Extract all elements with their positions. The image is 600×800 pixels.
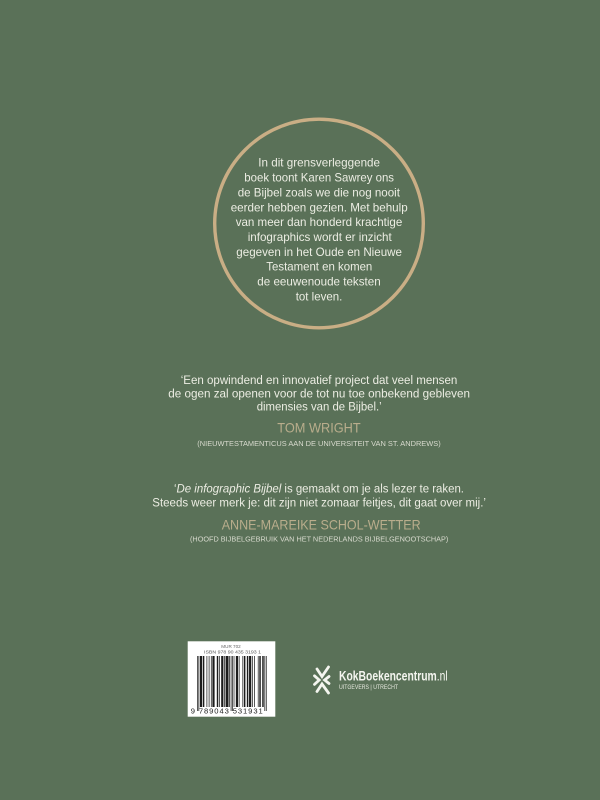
author name: ANNE-MAREIKE SCHOL-WETTER [222, 517, 421, 532]
publisher location: UITGEVERS | UTRECHT [339, 684, 398, 691]
quote text [168, 373, 470, 414]
ISBN text: ISBN 978 90 435 3193 1 [204, 650, 261, 654]
quote text: dimensies van de Bijbel.’ [257, 400, 382, 414]
publisher name: KokBoekencentrum.nl [339, 668, 448, 683]
barcode bars [197, 656, 267, 711]
gold ring [215, 119, 423, 328]
quote text: Steeds weer merk je: dit zijn niet zomaar feitjes, dit gaat over mij.’ [152, 496, 486, 510]
panel: circle with book description [215, 119, 423, 328]
icon: publisher mark [314, 667, 329, 693]
quote text: ‘De infographic Bijbel is gemaakt om je als lezer te raken. [174, 482, 464, 496]
description text [231, 156, 408, 303]
author role: (HOOFD BIJBELGEBRUIK VAN HET NEDERLANDS BIJBELGENOOTSCHAP) [190, 537, 448, 544]
description text: infographics wordt er inzicht [248, 230, 392, 244]
quote text [152, 482, 486, 510]
quote text: ‘Een opwindend en innovatief project dat veel mensen [181, 373, 457, 387]
description text: In dit grensverleggende [258, 156, 380, 170]
quote block: Tom Wright [168, 373, 470, 448]
barcode header text: MUR 702 [221, 644, 241, 649]
description text: eerder hebben gezien. Met behulp [231, 200, 408, 214]
barcode [188, 641, 275, 717]
barcode digits: 9 789043 531931 [191, 707, 263, 716]
barcode label background [188, 641, 275, 717]
description text: de Bijbel zoals we die nog nooit [238, 185, 401, 199]
description text: van meer dan honderd krachtige [236, 215, 403, 229]
author name: TOM WRIGHT [277, 421, 361, 436]
description text: boek toont Karen Sawrey ons [244, 171, 394, 185]
description text: de eeuwenoude teksten [257, 274, 381, 288]
author role: (NIEUWTESTAMENTICUS AAN DE UNIVERSITEIT VAN ST. ANDREWS) [197, 441, 441, 448]
publisher logo [314, 667, 448, 693]
quote text: de ogen zal openen voor de tot nu toe onbekend gebleven [168, 386, 470, 400]
description text: gegeven in het Oude en Nieuwe [236, 245, 402, 259]
description text: tot leven. [296, 289, 342, 303]
description text: Testament en komen [266, 260, 372, 274]
quote block: Anne-Mareike Schol-Wetter [152, 482, 486, 544]
